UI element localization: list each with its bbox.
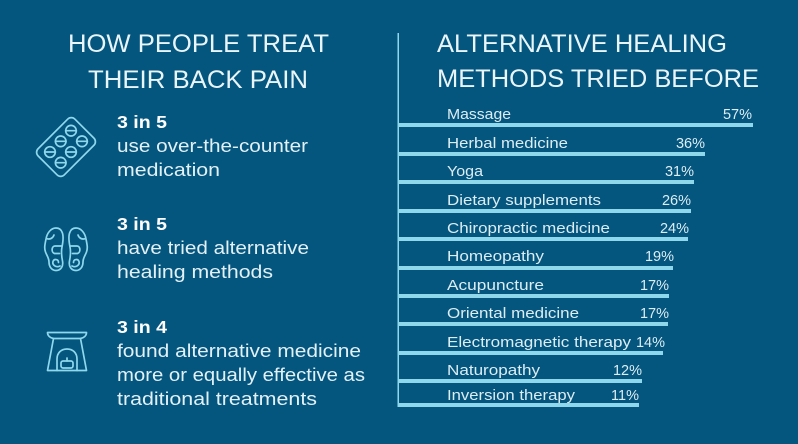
bar: yoga 31% (398, 163, 694, 184)
bar: acupuncture 17%: Acupuncture (447, 277, 544, 294)
bar: oriental medicine 17%: 17% (640, 306, 669, 322)
bar: homeopathy 19%: 19% (645, 249, 674, 265)
heading: alternative healing methods tried before: METHODS TRIED BEFORE (437, 65, 759, 93)
text: over-the-counter medication: medication (117, 160, 220, 180)
text: alternative healing methods: 3 in 5 (117, 214, 167, 234)
text: alternative medicine effectiveness: traditional treatments (117, 389, 317, 409)
bar: chiropractic medicine 24%: Chiropractic medicine (447, 220, 610, 237)
bar: dietary supplements 26% (398, 192, 691, 213)
bar: oriental medicine 17% (398, 305, 669, 326)
bar: yoga 31%: 31% (665, 164, 694, 180)
icon: feet reflexology (45, 228, 87, 270)
bar: inversion therapy 11% (398, 387, 639, 407)
bar: homeopathy 19% (398, 248, 674, 270)
chart axis line (398, 33, 399, 407)
heading: alternative healing methods tried before (437, 30, 759, 93)
icon: oil burner (48, 332, 86, 370)
bar: dietary supplements 26%: Dietary supplements (447, 192, 601, 209)
bar: yoga 31%: Yoga (447, 163, 484, 180)
bar: acupuncture 17%: 17% (640, 278, 669, 294)
heading: alternative healing methods tried before: ALTERNATIVE HEALING (437, 30, 727, 58)
text: alternative healing methods: healing methods (117, 262, 273, 282)
text: over-the-counter medication (117, 112, 308, 180)
bar: chiropractic medicine 24% (398, 220, 689, 241)
bar: inversion therapy 11%: 11% (611, 388, 639, 404)
text: over-the-counter medication: use over-the-counter (117, 136, 308, 156)
bar: dietary supplements 26%: 26% (662, 193, 691, 209)
bar: electromagnetic therapy 14%: 14% (636, 335, 665, 351)
heading: how people treat their back pain (68, 30, 329, 94)
bar: naturopathy 12%: Naturopathy (447, 362, 541, 379)
text: over-the-counter medication: 3 in 5 (117, 112, 167, 132)
icon: blister pack of pills (35, 116, 97, 178)
bar: electromagnetic therapy 14% (398, 334, 665, 355)
bar: inversion therapy 11%: Inversion therapy (447, 387, 576, 404)
bar: massage 57%: Massage (447, 106, 511, 123)
bar: chiropractic medicine 24%: 24% (660, 221, 689, 237)
bar: massage 57%: 57% (723, 107, 752, 123)
bar: oriental medicine 17%: Oriental medicine (447, 305, 579, 322)
bar: massage 57% (398, 106, 753, 127)
text: alternative medicine effectiveness: found alternative medicine (117, 341, 361, 361)
heading: how people treat their back pain: HOW PEOPLE TREAT (68, 30, 329, 58)
bar: naturopathy 12%: 12% (613, 363, 642, 379)
bar: acupuncture 17% (398, 277, 669, 298)
text: alternative healing methods (117, 214, 309, 282)
text: alternative medicine effectiveness (117, 317, 365, 409)
bar: naturopathy 12% (398, 362, 642, 383)
bar: herbal medicine 36%: 36% (676, 136, 705, 152)
bar chart: methods tried (398, 106, 753, 407)
text: alternative healing methods: have tried alternative (117, 238, 309, 258)
text: alternative medicine effectiveness: more or equally effective as (117, 365, 365, 385)
bar: electromagnetic therapy 14%: Electromagnetic therapy (447, 334, 632, 351)
bar: herbal medicine 36%: Herbal medicine (447, 135, 568, 152)
bar: homeopathy 19%: Homeopathy (447, 248, 545, 265)
heading: how people treat their back pain: THEIR BACK PAIN (88, 66, 308, 94)
text: alternative medicine effectiveness: 3 in 4 (117, 317, 167, 337)
bar: herbal medicine 36% (398, 135, 705, 156)
